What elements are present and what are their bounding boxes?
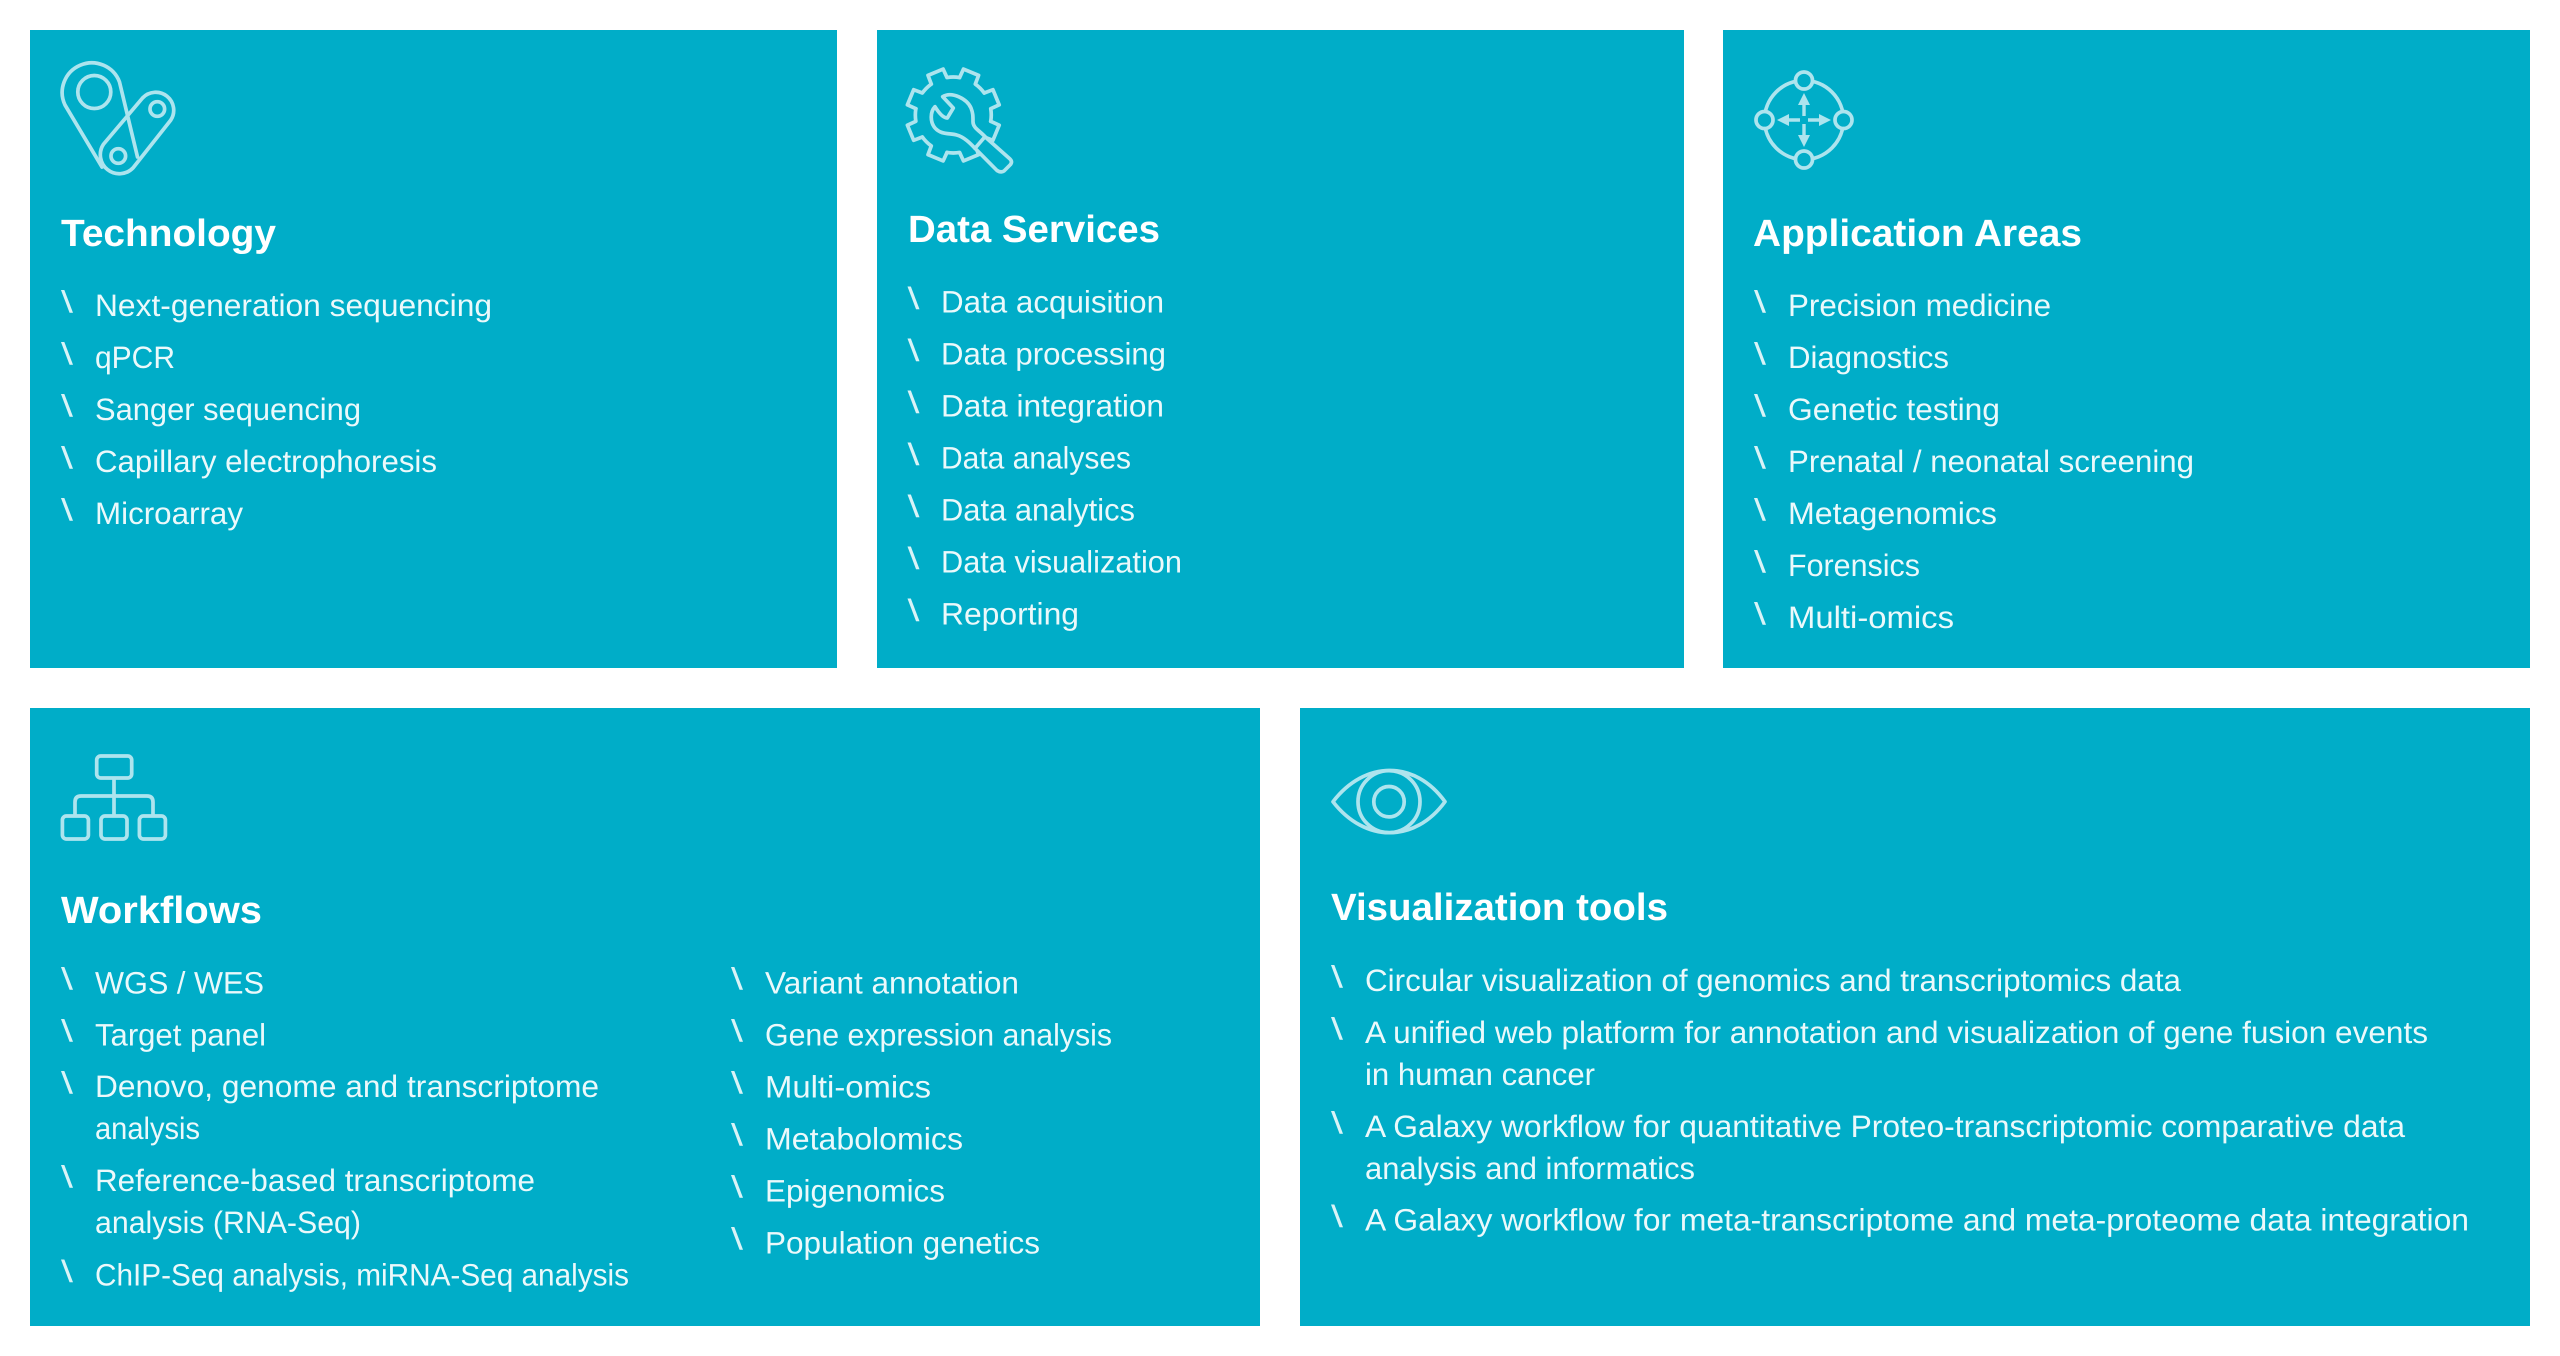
list: workflows left column: Target panel [95,1018,266,1052]
list: data services items: Reporting [941,596,1079,632]
list: workflows left column: Reference-based transcriptome [95,1163,535,1198]
list: data services items: \ [908,489,920,524]
list: workflows right column: Population genetics [765,1226,1040,1260]
list: data services items: \ [908,541,920,576]
list: technology items: \ [61,284,74,320]
list: data services items: \ [908,593,920,628]
list: workflows left column: \ [61,1254,74,1289]
list: technology items: \ [61,492,74,528]
list: workflows right column: Epigenomics [765,1174,945,1208]
panel: workflows [30,708,1260,1326]
list: application areas items: Genetic testing [1788,392,2000,427]
list: data services items: \ [908,333,920,368]
list: data services items: Data visualization [941,544,1182,580]
list: application areas items: \ [1754,492,1767,528]
list: data services items: \ [908,437,920,472]
list: application areas items: \ [1754,440,1767,476]
list: workflows left column: \ [61,1066,74,1100]
list: application areas items: Precision medicine [1788,288,2051,323]
list: visualization tools items: \ [1331,1106,1344,1140]
list: visualization tools items: A Galaxy workflow for meta-transcriptome and meta-proteome data integration [1365,1202,2469,1238]
list: workflows right column: \ [731,1066,744,1100]
list: technology items: Next-generation sequencing [95,288,492,323]
list: data services items: Data integration [941,388,1164,424]
list: application areas items: Multi-omics [1788,600,1954,635]
list: workflows right column: \ [731,1014,744,1048]
list: application areas items: Prenatal / neonatal screening [1788,444,2194,479]
icon: ring with arrows [1756,72,1852,168]
list: technology items: \ [61,440,74,476]
list: workflows right column: \ [731,962,744,996]
list: workflows left column: analysis [95,1111,200,1146]
list: visualization tools items: A unified web platform for annotation and visualization of gene fusion events [1365,1015,2428,1050]
list: workflows right column: Variant annotation [765,966,1019,1000]
list: workflows left column: ChIP-Seq analysis, miRNA-Seq analysis [95,1258,629,1292]
list: visualization tools items: A Galaxy workflow for quantitative Proteo-transcriptomic comparative data [1365,1109,2406,1144]
list: visualization tools items: \ [1331,1012,1344,1046]
list: data services items: \ [908,385,920,420]
list: workflows left column: WGS / WES [95,966,264,1000]
panel: visualization tools [1300,708,2530,1326]
list: application areas items: \ [1754,336,1767,372]
list: visualization tools items [1331,960,2469,1238]
icon: gear and wrench [903,65,1012,172]
list: workflows left column: \ [61,1014,74,1048]
list: data services items [908,281,1182,632]
list: application areas items: \ [1754,544,1767,580]
list: technology items: Capillary electrophoresis [95,444,437,479]
list: technology items: \ [61,388,74,424]
panel: technology [30,30,837,668]
list: visualization tools items: \ [1331,1199,1344,1234]
list: technology items: \ [61,336,74,372]
heading: visualization tools: Visualization tools [1331,887,1668,929]
list: data services items: Data analyses [941,440,1131,476]
list: workflows left column: \ [61,962,74,996]
panel: data services [877,30,1684,668]
list: workflows left column: \ [61,1160,74,1194]
list: data services items: Data analytics [941,492,1135,528]
list: application areas items: \ [1754,596,1767,632]
list: technology items [61,284,492,531]
panel: application areas [1723,30,2530,668]
list: workflows right column: Metabolomics [765,1122,963,1156]
list: application areas items: Metagenomics [1788,496,1997,531]
list: workflows right column [731,962,1112,1260]
icon: chain links [62,63,174,174]
heading: application areas: Application Areas [1753,213,2082,255]
icon: eye [1333,770,1445,833]
list: visualization tools items: \ [1331,960,1344,994]
list: application areas items [1754,284,2194,635]
list: application areas items: Forensics [1788,548,1920,583]
list: data services items: Data acquisition [941,284,1164,320]
list: workflows right column: Gene expression analysis [765,1018,1112,1052]
list: workflows right column: \ [731,1222,744,1256]
list: application areas items: Diagnostics [1788,340,1949,375]
list: workflows right column: \ [731,1118,744,1152]
list: visualization tools items: analysis and informatics [1365,1151,1695,1186]
list: workflows left column: analysis (RNA-Seq) [95,1205,361,1240]
list: technology items: Sanger sequencing [95,392,361,427]
list: workflows right column: \ [731,1170,744,1204]
list: workflows left column [61,962,629,1292]
list: data services items: Data processing [941,336,1166,372]
heading: data services: Data Services [908,209,1160,251]
heading: workflows: Workflows [61,890,262,932]
list: visualization tools items: in human cancer [1365,1057,1595,1092]
icon: hierarchy [62,756,165,839]
list: data services items: \ [908,281,920,316]
list: visualization tools items: Circular visualization of genomics and transcriptomics data [1365,963,2182,998]
list: technology items: Microarray [95,496,244,531]
list: technology items: qPCR [95,340,175,375]
list: application areas items: \ [1754,388,1767,424]
list: application areas items: \ [1754,284,1767,320]
list: workflows right column: Multi-omics [765,1070,931,1104]
list: workflows left column: Denovo, genome and transcriptome [95,1069,599,1104]
heading: technology: Technology [61,213,276,255]
